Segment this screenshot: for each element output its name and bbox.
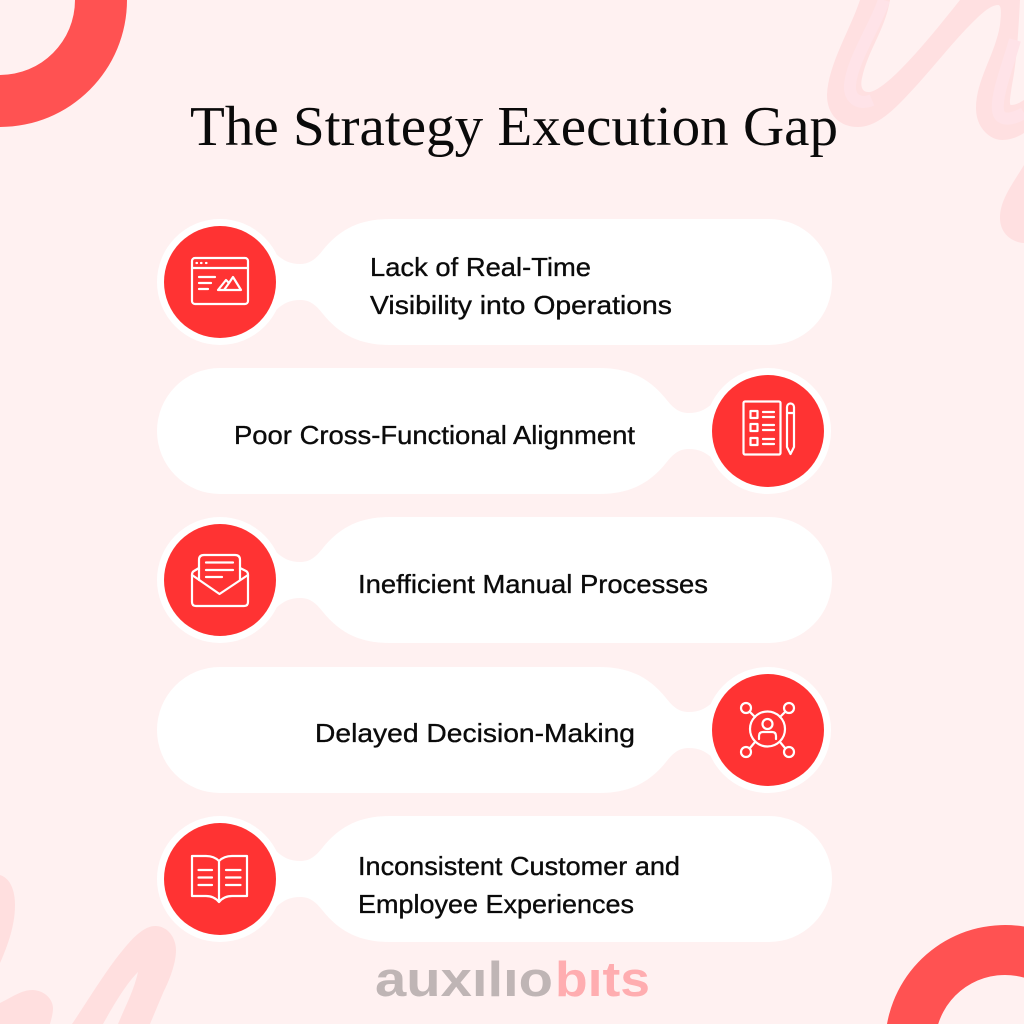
label: Delayed Decision-Making (315, 718, 635, 748)
icon disc (157, 517, 283, 643)
label: Inefficient Manual Processes (358, 569, 708, 599)
red circle (164, 524, 276, 636)
label: Inconsistent Customer and (358, 851, 680, 881)
icon: open envelope (192, 555, 248, 606)
decoration: bottom-left squiggle (0, 875, 176, 1024)
decoration: top-left ring (0, 0, 127, 127)
label: Lack of Real-Time (370, 252, 591, 282)
pill shape (220, 219, 832, 345)
label: Employee Experiences (358, 889, 634, 919)
label: Visibility into Operations (370, 290, 672, 320)
panel: delayed decision-making (157, 667, 831, 793)
icon: connected person (741, 703, 794, 757)
label (370, 252, 672, 320)
decoration: bottom-right ring (887, 925, 1024, 1024)
icon disc (157, 816, 283, 942)
title: The Strategy Execution Gap (190, 96, 838, 158)
logo: bıts (555, 953, 650, 1007)
panel: manual processes (157, 517, 832, 643)
pill shape (220, 816, 832, 942)
icon disc (705, 667, 831, 793)
pill shape (220, 517, 832, 643)
icon disc (705, 368, 831, 494)
pill shape (157, 667, 769, 793)
icon: checklist and pencil (744, 402, 794, 454)
icon: open book (192, 856, 247, 902)
panel: inconsistent experiences (157, 816, 832, 942)
panel: cross-functional alignment (157, 368, 831, 494)
logo (375, 953, 650, 1007)
red circle (712, 375, 824, 487)
panel: real-time visibility (157, 219, 832, 345)
logo: auxılıo (375, 953, 553, 1007)
label: Poor Cross-Functional Alignment (234, 420, 636, 450)
red circle (712, 674, 824, 786)
icon disc (157, 219, 283, 345)
decoration: top-right squiggle (827, 0, 1024, 243)
icon: browser window (192, 258, 248, 304)
label (358, 851, 680, 919)
red circle (164, 823, 276, 935)
red circle (164, 226, 276, 338)
pill shape (157, 368, 769, 494)
